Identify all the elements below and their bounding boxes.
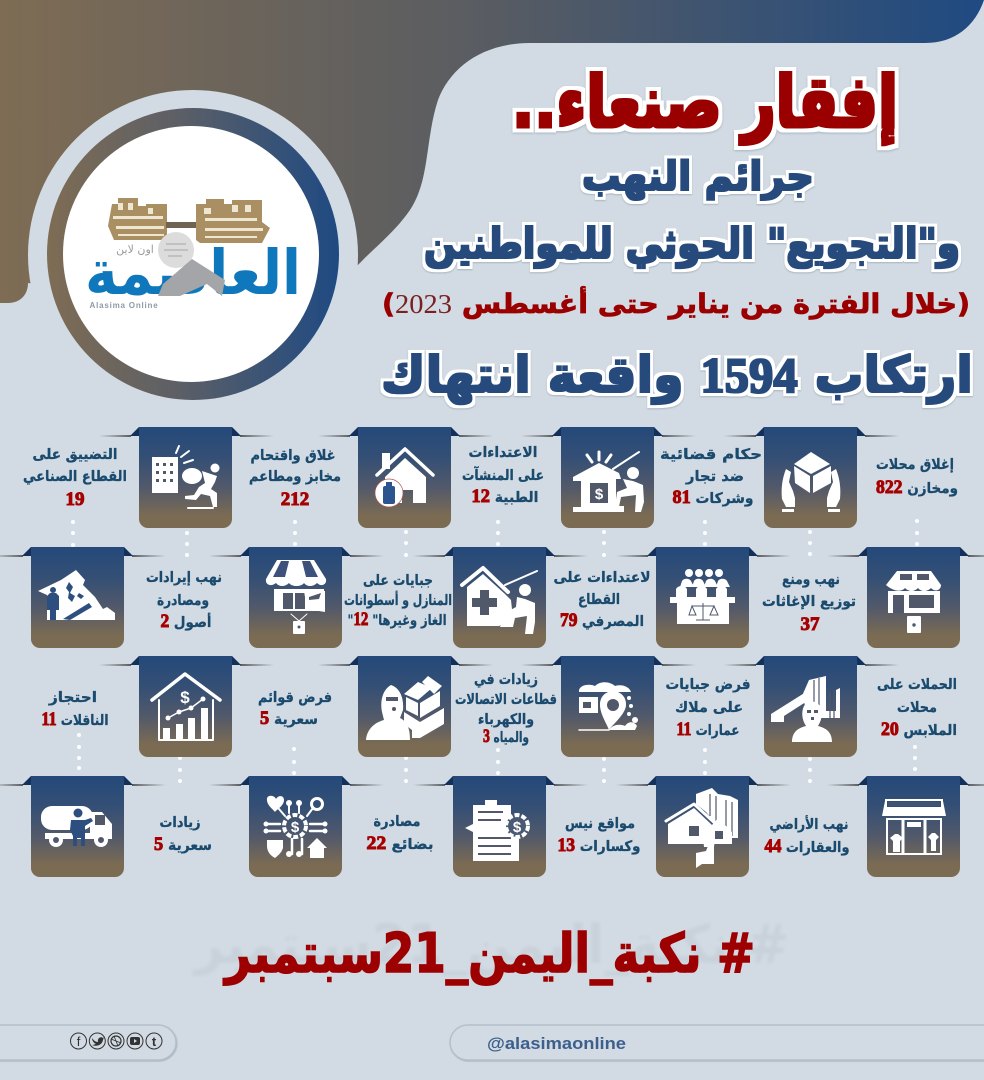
title heading <box>424 60 960 269</box>
label: industrial sector line 2: القطاع الصناعي <box>23 469 127 485</box>
icon: clipboard with dollar gear: $ <box>513 819 522 836</box>
label: medical facilities: الاعتداءات <box>468 445 538 461</box>
hashtag main: # نكبة_اليمن_21سبتمبر <box>222 922 755 985</box>
icon: judges bench and scale <box>670 569 735 624</box>
label: industrial sector: التضييق على <box>32 447 118 463</box>
card: tankers and boxes <box>318 656 493 757</box>
card: shops closed <box>827 547 984 648</box>
handle text: @alasimaonline <box>487 1034 626 1053</box>
label: clothing raids line 3: الملابس 20 <box>881 719 957 740</box>
logo: wordmark: العاصمة <box>85 236 301 309</box>
period subtitle: (خلال الفترة من يناير حتى أغسطس 2023) <box>382 286 970 320</box>
card: industrial sector <box>99 427 274 528</box>
title line 1: إفقار صنعاء.. <box>512 60 898 145</box>
label: price rises line 2: سعرية 5 <box>154 834 212 855</box>
icon: box held in hands <box>782 452 840 512</box>
label: confiscated goods line 2: بضائع 22 <box>366 833 434 854</box>
icon: masked man with boxes <box>366 676 444 740</box>
label: bakeries line 2: مخابز ومطاعم <box>249 469 341 485</box>
icon: collapsed house with figures <box>38 570 115 620</box>
icon: houses with hand and money <box>666 788 738 868</box>
icon: closed shop with padlock <box>886 571 941 633</box>
icon: clothing storefront <box>882 799 946 854</box>
label: utilities increases line 4: والمياه 3 <box>483 726 529 747</box>
label: judicial rulings: حكام قضائية <box>660 447 762 463</box>
icon: house with growth chart <box>152 674 220 740</box>
number 212: 212 <box>281 489 309 510</box>
icon: youtube <box>127 1033 143 1049</box>
logo: seal <box>158 232 194 268</box>
icon: house and gas cylinder <box>375 449 433 507</box>
label: confiscated goods: مصادرة <box>374 814 420 830</box>
icon: twitter <box>89 1033 105 1049</box>
card: price lists <box>99 656 274 757</box>
card: clothing store icon <box>827 776 984 877</box>
label: crusher sites line 2: وكسارات 13 <box>558 835 640 856</box>
social pill <box>0 1025 176 1060</box>
card: utilities increases <box>521 656 696 757</box>
label: shops closed: إغلاق محلات <box>876 457 954 473</box>
label: utilities increases: زيادات في <box>474 672 538 688</box>
label: utilities increases line 3: والكهرباء <box>478 712 534 728</box>
icon: dribbble <box>108 1033 124 1049</box>
logo: buildings <box>108 198 270 243</box>
card: medical facilities <box>521 427 696 528</box>
card: aid distribution <box>616 547 791 648</box>
label: shops closed line 2: ومخازن 822 <box>876 477 958 498</box>
icon: bank under attack <box>573 452 644 512</box>
label: building levies: فرض جبايات <box>666 677 750 693</box>
icon: facebook <box>70 1033 86 1049</box>
logo circle <box>28 90 358 420</box>
label: land looting: نهب الأراضي <box>770 815 848 833</box>
icon: clipboard with dollar gear <box>465 800 528 861</box>
label: clothing raids: الحملات على <box>877 677 957 693</box>
card: land looting icon <box>616 776 791 877</box>
card: building levies <box>724 656 899 757</box>
label: levies on homes line 3: الغاز وغيرها" 12" <box>348 609 446 630</box>
icon: gear network: $ <box>291 819 300 836</box>
label: revenue looting line 3: أصول 2 <box>160 611 212 632</box>
label: levies on homes: جبايات على <box>363 573 433 589</box>
icon: tumblr: t <box>152 1034 157 1049</box>
icon: clinic under attack <box>462 568 537 634</box>
header gradient shape <box>0 0 984 320</box>
label: revenue looting line 2: ومصادرة <box>157 593 209 609</box>
hashtag <box>192 913 789 985</box>
handle pill <box>450 1025 984 1060</box>
dotted connectors <box>71 519 919 783</box>
hashtag shadow ghost: # نكبة_اليمن_21سبتمبر <box>192 913 789 976</box>
label: bakeries: غلاق واقتحام <box>250 448 336 464</box>
icon: closed awning shop <box>266 560 326 634</box>
icon: tumblr <box>146 1033 162 1049</box>
label: building levies line 2: على ملاك <box>675 700 743 716</box>
icon: masked man before buildings <box>771 676 840 742</box>
icon: house with growth chart: $ <box>180 688 190 707</box>
label: truck detention: احتجاز <box>48 690 97 706</box>
label: aid distribution line 2: توزيع الإغاثات <box>762 594 856 610</box>
label: land looting line 2: والعقارات 44 <box>764 836 850 857</box>
label: banking sector attacks: لاعتداءات على <box>554 570 650 586</box>
label: utilities increases line 2: قطاعات الاتصالات <box>455 692 557 708</box>
label: crusher sites: مواقع نيس <box>565 816 635 832</box>
card: judicial rulings <box>724 427 899 528</box>
label: clothing raids line 2: محلات <box>897 700 937 716</box>
card: bakeries <box>318 427 493 528</box>
label: medical facilities line 3: الطبية 12 <box>472 486 538 507</box>
label: banking sector attacks line 3: المصرفي 79 <box>560 610 644 631</box>
icon: location pin and gear <box>579 682 638 730</box>
logo: gray sail <box>158 259 225 296</box>
card: banking sector attacks <box>413 547 588 648</box>
label: banking sector attacks line 2: القطاع <box>578 592 620 608</box>
logo: small arabic tag: اون لاين <box>116 243 154 256</box>
label: levies on homes line 2: المنازل و أسطوانات <box>344 591 452 609</box>
icon: thief fleeing building <box>152 446 220 508</box>
number 37: 37 <box>800 614 820 635</box>
icon: gear network <box>264 796 328 858</box>
label: truck detention line 2: الناقلات 11 <box>42 709 108 730</box>
label: aid distribution: نهب ومنع <box>782 572 840 588</box>
label: judicial rulings line 2: ضد تجار <box>685 469 744 485</box>
card: crusher sites icon <box>413 776 588 877</box>
label: building levies line 3: عمارات 11 <box>676 719 740 740</box>
headline count: ارتكاب 1594 واقعة انتهاك <box>381 346 973 405</box>
label: price lists: فرض قوائم <box>258 690 332 706</box>
logo: latin tag: Alasima Online <box>90 301 158 310</box>
label: revenue looting: نهب إيرادات <box>146 570 222 586</box>
label: price rises: زيادات <box>160 815 200 831</box>
card: fuel tanker <box>0 776 166 877</box>
title line 2: جرائم النهب <box>582 154 814 200</box>
icon: facebook: f <box>77 1034 81 1049</box>
card: confiscated goods icon <box>209 776 384 877</box>
number 19: 19 <box>66 489 84 510</box>
card: revenue looting <box>0 547 166 648</box>
icon: tanker truck with man <box>41 806 112 847</box>
label: judicial rulings line 3: وشركات 81 <box>672 487 754 508</box>
icon: bank under attack: $ <box>595 486 604 503</box>
label: price lists line 2: سعرية 5 <box>260 708 318 729</box>
card: levies on homes <box>209 547 384 648</box>
label: medical facilities line 2: على المنشآت <box>462 466 544 484</box>
